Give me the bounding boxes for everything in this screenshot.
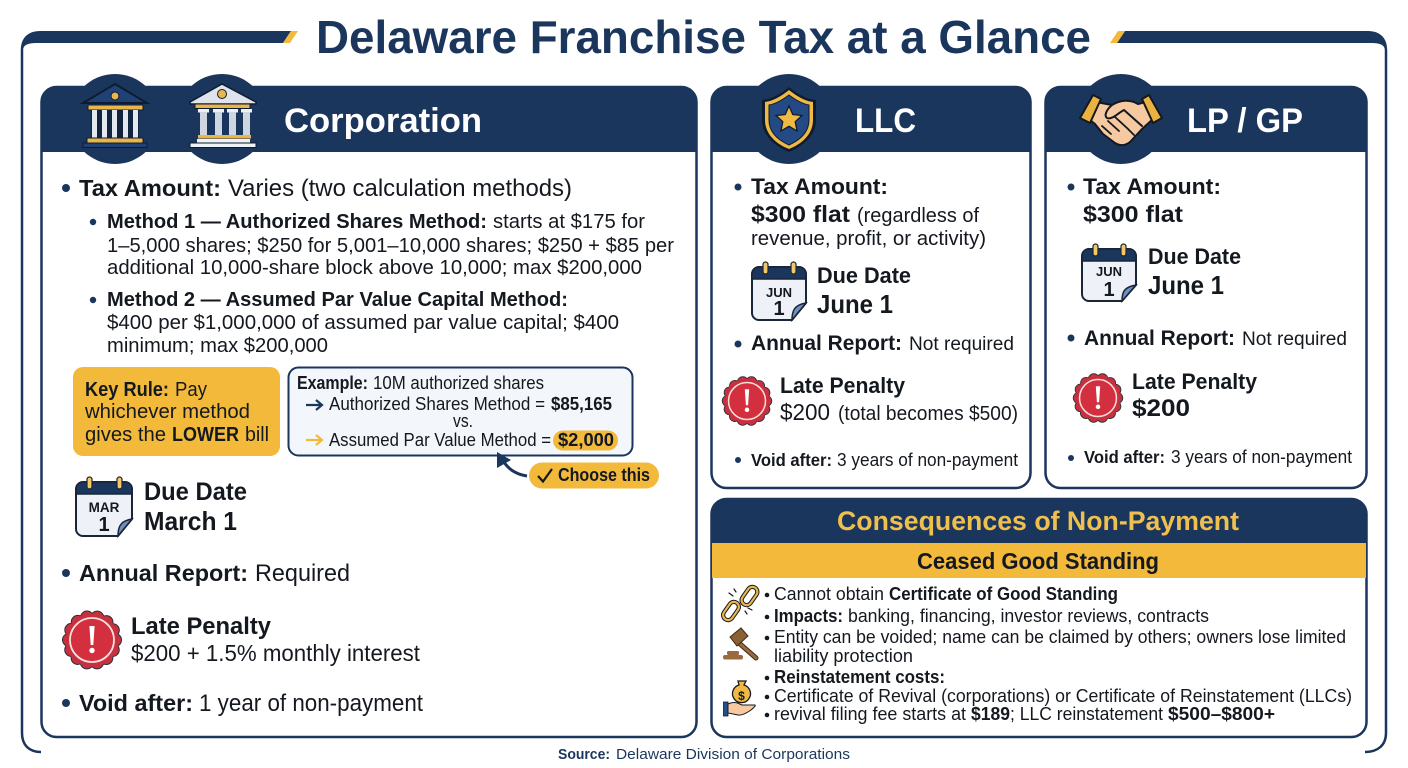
source line: Delaware Division of Corporations [616, 746, 850, 763]
icon: money bag in hand: $ [738, 689, 745, 703]
arrow: navy [306, 400, 322, 410]
due date [817, 263, 911, 319]
icon: calendar march 1 [76, 477, 132, 536]
consequences list: banking, financing, investor reviews, contracts [848, 606, 1209, 626]
icon: calendar march 1: 1 [98, 514, 110, 536]
icon: calendar june 1: 1 [1103, 279, 1115, 301]
consequences list: Cannot obtain [774, 584, 884, 604]
example callout: Example: [297, 373, 368, 393]
due date: June 1 [817, 289, 893, 319]
annual report: Not required [1242, 328, 1347, 350]
icon: calendar june 1: JUN [766, 285, 792, 300]
annual report [1068, 327, 1347, 350]
choose this badge [529, 462, 659, 488]
icon: handshake [1080, 95, 1162, 145]
due date: Due Date [817, 263, 911, 288]
late penalty: Late Penalty [1132, 369, 1257, 394]
tax amount: Tax Amount: [751, 174, 888, 199]
key rule callout: Key Rule: [85, 379, 169, 401]
annual report: Annual Report: [1084, 327, 1235, 350]
icon: gavel [723, 628, 756, 660]
icon: shield with star [762, 87, 816, 152]
LP / GP header [1045, 74, 1367, 164]
arrow: gold [306, 435, 322, 445]
example callout: vs. [453, 411, 473, 431]
panel: corporation [41, 74, 697, 737]
panel: consequences of non-payment [711, 499, 1367, 737]
due date: Due Date [1148, 244, 1241, 269]
consequences list: ; LLC reinstatement [1010, 704, 1163, 724]
late penalty [780, 373, 1018, 425]
choose this badge: Choose this [558, 465, 650, 485]
key rule callout: bill [245, 424, 269, 446]
method 1: starts at $175 for [493, 210, 645, 233]
void after: Void after: [1084, 447, 1165, 467]
void after [1068, 446, 1352, 467]
annual report: Not required [909, 333, 1014, 355]
icon: money bag in hand [724, 681, 755, 716]
late penalty: $200 [1132, 395, 1190, 422]
consequences list: Impacts: [774, 606, 843, 626]
tax amount: Varies (two calculation methods) [228, 175, 572, 202]
consequences list: liability protection [774, 646, 913, 666]
method 2: minimum; max $200,000 [107, 334, 328, 357]
consequences header [711, 499, 1367, 543]
late penalty: $200 + 1.5% monthly interest [131, 640, 421, 666]
tax amount: Tax Amount: [1083, 174, 1221, 199]
icon: calendar june 1 [752, 262, 806, 320]
void after: 3 years of non-payment [1171, 446, 1352, 467]
tax amount: (regardless of [857, 204, 979, 227]
method 2 [90, 288, 619, 357]
due date: June 1 [1148, 270, 1224, 300]
LLC header: LLC [855, 102, 916, 140]
LLC header [711, 74, 1031, 164]
example callout: 10M authorized shares [373, 373, 544, 393]
late penalty: Late Penalty [780, 373, 905, 398]
tax amount [62, 175, 572, 202]
due date: March 1 [144, 506, 237, 536]
example callout [288, 368, 632, 456]
panel: LLC [711, 74, 1031, 488]
annual report: Annual Report: [751, 332, 902, 355]
consequences list: $500–$800+ [1168, 704, 1275, 724]
late penalty: Late Penalty [131, 613, 271, 640]
title: Delaware Franchise Tax at a Glance [316, 11, 1091, 63]
icon: late penalty badge [724, 378, 770, 424]
consequences list: Certificate of Revival (corporations) or Certificate of Reinstatement (LLCs) [774, 686, 1352, 706]
icon: calendar march 1: MAR [89, 500, 120, 515]
key rule callout: Pay [175, 379, 207, 401]
late penalty: (total becomes $500) [838, 403, 1018, 425]
tax amount [734, 174, 986, 250]
consequences list: Certificate of Good Standing [889, 584, 1118, 604]
annual report [62, 560, 350, 587]
tax amount: $300 flat [1083, 201, 1183, 227]
void after: Void after: [751, 450, 832, 470]
void after [62, 690, 423, 717]
void after: Void after: [79, 690, 193, 716]
icon: light bank building [190, 84, 256, 148]
icon: calendar june 1: JUN [1096, 264, 1122, 279]
icon: broken chain [721, 585, 759, 622]
icon: navy bank building [83, 84, 147, 148]
annual report: Required [255, 560, 350, 587]
consequences list: $189 [971, 704, 1010, 724]
icon: late penalty badge [65, 613, 119, 667]
panel: LP / GP [1045, 74, 1367, 488]
method 2: Method 2 — Assumed Par Value Capital Method: [107, 288, 568, 311]
annual report: Annual Report: [79, 560, 248, 586]
method 1: 1–5,000 shares; $250 for 5,001–10,000 shares; $250 + $85 per [107, 234, 674, 257]
due date [1148, 244, 1241, 300]
example callout: Assumed Par Value Method = [329, 430, 551, 450]
arrow: choose this pointer [497, 452, 527, 476]
LP / GP header: LP / GP [1187, 102, 1303, 140]
icon: late penalty badge [1075, 375, 1121, 421]
method 1: Method 1 — Authorized Shares Method: [107, 210, 487, 233]
void after: 3 years of non-payment [837, 449, 1018, 470]
method 1 [90, 210, 674, 279]
corporation header: Corporation [284, 102, 482, 140]
late penalty [1132, 369, 1257, 422]
corporation header [41, 74, 697, 164]
late penalty [131, 613, 421, 666]
ceased good standing band [712, 543, 1366, 578]
consequences list: Entity can be voided; name can be claimed by others; owners lose limited [774, 627, 1346, 647]
tax amount: $300 flat [751, 201, 850, 227]
ceased good standing band: Ceased Good Standing [917, 548, 1159, 574]
consequences list: revival filing fee starts at [774, 704, 966, 724]
example callout: $2,000 [558, 430, 614, 450]
icon: calendar june 1: 1 [773, 298, 785, 320]
consequences list: Reinstatement costs: [774, 667, 945, 687]
key rule callout: whichever method [84, 401, 250, 423]
void after: 1 year of non-payment [199, 690, 423, 717]
key rule callout [73, 367, 280, 456]
consequences list [765, 584, 1352, 724]
due date [144, 478, 247, 536]
key rule callout: gives the [85, 424, 166, 446]
annual report [734, 332, 1014, 355]
icon: calendar june 1 [1082, 244, 1136, 301]
tax amount: revenue, profit, or activity) [751, 227, 986, 250]
key rule callout: LOWER [172, 424, 239, 446]
method 1: additional 10,000-share block above 10,000; max $200,000 [107, 256, 642, 279]
tax amount [1068, 174, 1221, 227]
method 2: $400 per $1,000,000 of assumed par value capital; $400 [107, 311, 619, 334]
consequences header: Consequences of Non-Payment [837, 506, 1239, 536]
tax amount: Tax Amount: [79, 175, 221, 201]
due date: Due Date [144, 478, 247, 506]
void after [735, 449, 1018, 470]
example callout: Authorized Shares Method = [329, 394, 545, 414]
example callout: $85,165 [551, 394, 612, 414]
late penalty: $200 [780, 399, 830, 425]
source line: Source: [558, 746, 610, 763]
